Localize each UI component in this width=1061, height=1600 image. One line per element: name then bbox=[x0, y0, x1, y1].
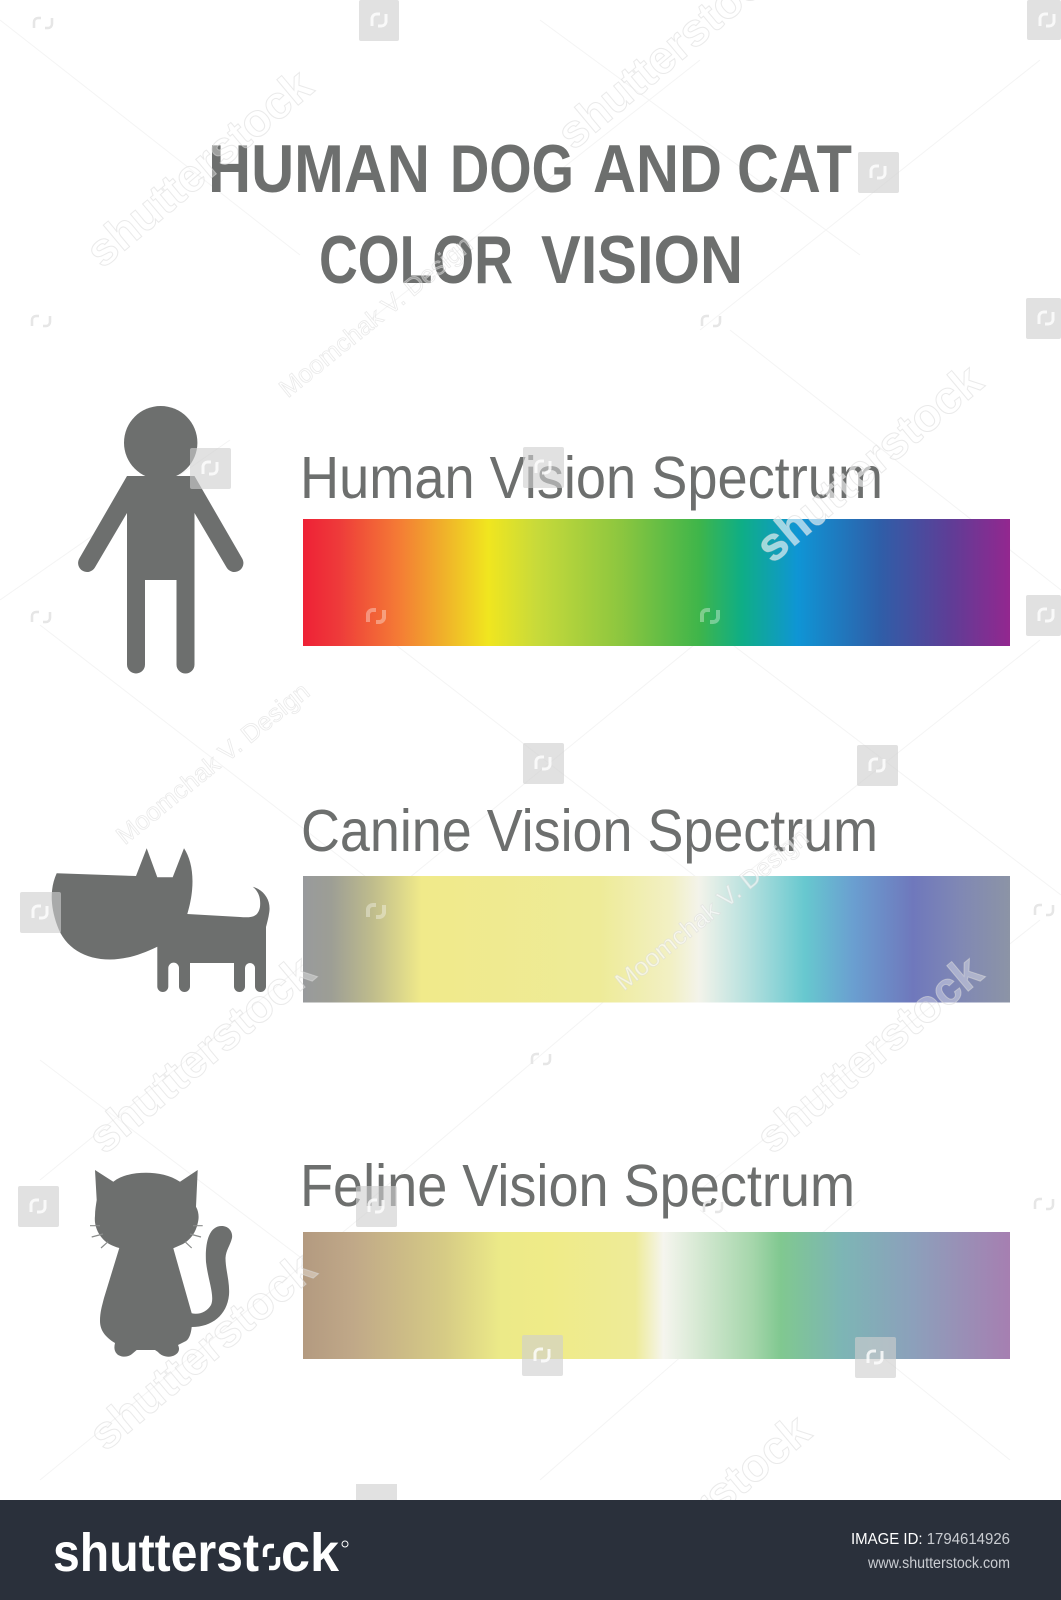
panel: human vision bbox=[78, 406, 1010, 674]
footer image id: IMAGE ID: 1794614926 bbox=[851, 1531, 1010, 1548]
title: HUMAN bbox=[208, 131, 430, 207]
title: CAT bbox=[737, 131, 852, 207]
panel: feline vision bbox=[90, 1153, 1010, 1359]
watermark: shutterstock and author text: shutterstock bbox=[79, 1241, 325, 1460]
spectrum bar: canine bbox=[303, 876, 1010, 1002]
watermark: shutterstock and author text: Moomchak V. Design bbox=[274, 230, 478, 403]
watermark: shutterstock and author text: shutterstock bbox=[746, 353, 992, 572]
title: COLOR bbox=[319, 222, 513, 298]
spectrum bar: human bbox=[303, 519, 1010, 646]
watermark: shutterstock and author text: Moomchak V. Design bbox=[111, 677, 315, 850]
footer logo: shutterstock: ck bbox=[281, 1523, 340, 1583]
title: DOG bbox=[450, 131, 574, 207]
watermark: shutterstock and author text: shutterstock bbox=[78, 944, 324, 1163]
spectrum bar: feline bbox=[303, 1232, 1010, 1359]
watermark: shutterstock and author text: shutterstock bbox=[76, 58, 322, 277]
title: VISION bbox=[541, 222, 743, 298]
footer url: www.shutterstock.com bbox=[867, 1555, 1010, 1572]
heading: feline vision spectrum: Feline Vision Spectrum bbox=[300, 1153, 855, 1219]
panel: canine vision bbox=[52, 798, 1010, 1002]
footer bar bbox=[0, 1500, 1061, 1600]
icon: dog silhouette bbox=[52, 848, 270, 992]
footer logo: shutterstock: o bbox=[262, 1523, 281, 1583]
heading: canine vision spectrum: Canine Vision Spectrum bbox=[301, 798, 878, 864]
icon: cat silhouette bbox=[90, 1170, 232, 1357]
heading: human vision spectrum: Human Vision Spectrum bbox=[300, 445, 883, 511]
footer logo: shutterstock: shutterst bbox=[53, 1523, 259, 1583]
icon: human silhouette bbox=[78, 406, 243, 674]
watermark: shutterstock and author text: shutterstock bbox=[746, 944, 992, 1163]
watermark: shutterstock and author text: Moomchak V. Design bbox=[610, 823, 814, 996]
title bbox=[208, 131, 852, 298]
title: AND bbox=[593, 131, 722, 207]
